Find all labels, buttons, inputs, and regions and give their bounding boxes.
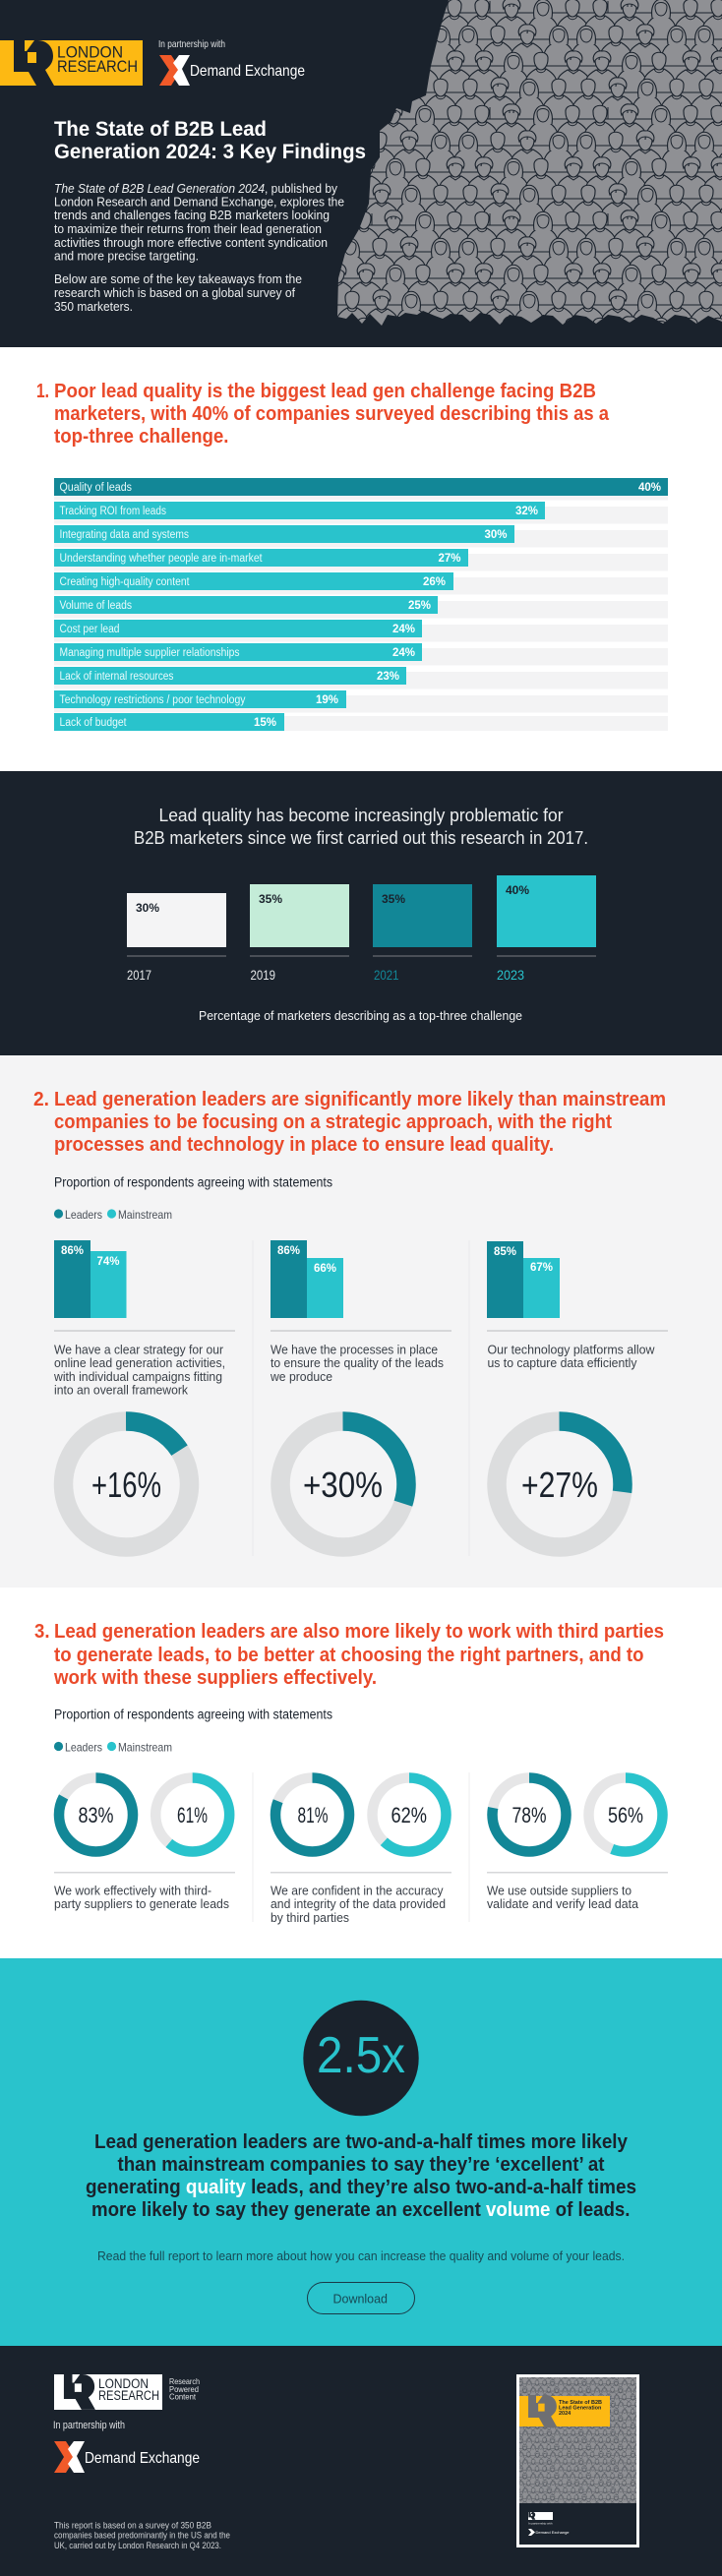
bar chart: challenges: Lack of budget xyxy=(59,717,127,729)
intro text: The State of B2B Lead Generation 2024, published by xyxy=(54,182,338,196)
report cover: The State of B2B xyxy=(559,2400,602,2406)
heading: finding 1: marketers, with 40% of companies surveyed describing this as a xyxy=(54,402,610,425)
chart subtitle: Proportion of respondents agreeing with statements xyxy=(54,1707,332,1721)
intro text: trends and challenges facing B2B marketers looking xyxy=(54,209,330,222)
column: effective suppliers xyxy=(54,1778,235,1911)
heading: trend: B2B marketers since we first carried out this research in 2017. xyxy=(134,828,588,848)
key message: than mainstream companies to say they’re ‘excellent’ at xyxy=(118,2153,605,2176)
panel: finding 3 xyxy=(0,1588,722,1958)
key message: generating quality leads, and they’re also two-and-a-half times xyxy=(86,2176,636,2198)
legend: Leaders xyxy=(65,1208,102,1222)
heading: finding 2: companies to be focusing on a strategic approach, with the right xyxy=(54,1110,612,1133)
bar chart: challenges: Understanding whether people are in-market xyxy=(59,553,263,565)
heading: finding 3: work with these suppliers effectively. xyxy=(53,1666,377,1689)
bar chart: yearly percentages: 2019 xyxy=(250,967,275,983)
methodology note: UK, carried out by London Research in Q4 2023. xyxy=(54,2541,221,2551)
tagline: Content xyxy=(169,2392,197,2402)
report cover: Demand Exchange xyxy=(535,2530,570,2535)
logo: London Research xyxy=(54,2374,162,2410)
logo: Demand Exchange: Demand Exchange xyxy=(85,2450,200,2467)
bar chart: yearly percentages xyxy=(127,875,596,983)
bar chart: challenges: Quality of leads xyxy=(59,482,132,494)
column: technology platforms: Our technology platforms allow xyxy=(488,1342,655,1357)
column: clear strategy: into an overall framework xyxy=(54,1383,188,1397)
bar chart: challenges: 40% xyxy=(638,482,661,494)
bar chart: challenges: Cost per lead xyxy=(59,624,120,635)
column: data confidence: and integrity of the data provided xyxy=(271,1896,446,1911)
column: technology platforms: +27% xyxy=(521,1465,598,1505)
panel: call to action xyxy=(0,1958,722,2346)
bar chart: challenges: 24% xyxy=(392,624,415,635)
intro text: 350 marketers. xyxy=(54,300,133,314)
heading: finding 1: top-three challenge. xyxy=(54,425,228,448)
column: clear strategy: 74% xyxy=(96,1256,120,1268)
bar chart: challenges: Tracking ROI from leads xyxy=(59,506,166,517)
report cover: In partnership with xyxy=(528,2522,553,2526)
heading: finding 2 xyxy=(33,1088,666,1156)
partnership label: In partnership with xyxy=(158,38,225,50)
intro text: London Research and Demand Exchange, explores the xyxy=(54,195,344,209)
chart subtitle: Proportion of respondents agreeing with statements xyxy=(54,1174,332,1190)
dividers xyxy=(252,1772,470,1922)
column: quality processes xyxy=(270,1240,451,1547)
bar chart: yearly percentages: 2021 xyxy=(374,967,399,983)
panel: lead quality trend xyxy=(0,771,722,1055)
bar chart: challenges: Creating high-quality content xyxy=(59,576,190,588)
logo: Demand Exchange: Demand Exchange xyxy=(190,63,305,80)
logo: London Research: RESEARCH xyxy=(98,2388,159,2403)
panel: finding 1 xyxy=(0,347,722,771)
download button xyxy=(307,2282,415,2313)
title: Generation 2024: 3 Key Findings xyxy=(54,140,366,163)
column: quality processes: We have the processes in place xyxy=(271,1342,438,1357)
logo: London Research xyxy=(0,40,143,86)
key message: Lead generation leaders are two-and-a-half times more likely xyxy=(94,2130,629,2153)
legend xyxy=(54,1208,172,1222)
bar chart: yearly percentages: 30% xyxy=(136,901,159,915)
intro text: Below are some of the key takeaways from the xyxy=(54,272,302,286)
column: data confidence xyxy=(271,1778,451,1925)
tagline: Powered xyxy=(169,2384,199,2394)
bar chart: yearly percentages: 35% xyxy=(259,892,282,906)
column: data confidence: 62% xyxy=(391,1803,427,1827)
bar chart: challenges: 24% xyxy=(392,647,415,659)
column: outside suppliers: We use outside suppliers to xyxy=(487,1883,632,1898)
intro text xyxy=(54,182,344,314)
heading: finding 1 xyxy=(36,380,610,448)
logo: Demand Exchange xyxy=(159,55,305,86)
bar chart: challenges: Volume of leads xyxy=(59,600,132,612)
panel: hero header xyxy=(0,0,722,347)
logo: London Research: LONDON xyxy=(57,43,123,61)
column: technology platforms: 85% xyxy=(494,1246,516,1258)
intro text: research which is based on a global survey of xyxy=(54,286,296,300)
intro text: and more precise targeting. xyxy=(54,250,199,264)
logo: London Research: LONDON xyxy=(98,2376,149,2391)
bar chart: challenges: 30% xyxy=(484,529,508,541)
column: effective suppliers: 83% xyxy=(79,1803,114,1827)
partnership label: In partnership with xyxy=(53,2420,125,2431)
report cover: 2024 xyxy=(559,2411,572,2417)
column: technology platforms: us to capture data efficiently xyxy=(488,1355,637,1370)
column: effective suppliers: 61% xyxy=(177,1803,208,1827)
intro text: to maximize their returns from their lead generation xyxy=(54,222,322,236)
column: clear strategy xyxy=(53,1240,235,1547)
legend: Mainstream xyxy=(118,1741,172,1755)
legend: Leaders xyxy=(65,1741,102,1755)
methodology note: companies based predominantly in the US and the xyxy=(54,2530,230,2542)
heading: finding 2: 2. xyxy=(33,1088,49,1110)
key message: more likely to say they generate an excellent volume of leads. xyxy=(91,2198,631,2221)
bar chart: yearly percentages: 2023 xyxy=(497,967,524,983)
bar chart: challenges: 32% xyxy=(515,506,538,517)
column: quality processes: 86% xyxy=(277,1245,300,1257)
dividers xyxy=(252,1240,470,1556)
heading: finding 2: Lead generation leaders are significantly more likely than mainstream xyxy=(54,1088,666,1110)
intro text: activities through more effective content syndication xyxy=(54,236,328,250)
illustration: crowd of people xyxy=(337,0,722,326)
logo: London Research: RESEARCH xyxy=(57,57,138,76)
bar chart: challenges: Lack of internal resources xyxy=(59,671,174,683)
heading: finding 3 xyxy=(34,1620,664,1689)
bar chart: challenges: 26% xyxy=(423,576,446,588)
column: effective suppliers: We work effectively with third- xyxy=(54,1883,211,1898)
bar chart: challenges: 27% xyxy=(438,553,460,565)
heading: finding 3: 3. xyxy=(34,1620,49,1643)
column: quality processes: 66% xyxy=(314,1263,336,1275)
report cover xyxy=(516,2374,639,2547)
column: data confidence: by third parties xyxy=(271,1910,349,1925)
title xyxy=(54,117,366,163)
methodology note xyxy=(54,2520,230,2551)
column: outside suppliers: validate and verify lead data xyxy=(487,1896,639,1911)
panel: finding 2 xyxy=(0,1055,722,1588)
column: data confidence: We are confident in the accuracy xyxy=(271,1883,444,1898)
report cover: Lead Generation xyxy=(559,2406,602,2412)
column: technology platforms xyxy=(487,1241,668,1547)
column: outside suppliers: 56% xyxy=(608,1803,643,1827)
tagline xyxy=(169,2376,200,2402)
heading: finding 1: Poor lead quality is the biggest lead gen challenge facing B2B xyxy=(54,380,596,402)
column: clear strategy: with individual campaigns fitting xyxy=(53,1369,222,1384)
column: quality processes: to ensure the quality of the leads xyxy=(271,1355,444,1370)
column: clear strategy: 86% xyxy=(61,1245,84,1257)
heading: finding 2: processes and technology in place to ensure lead quality. xyxy=(54,1133,554,1156)
heading: finding 3: Lead generation leaders are also more likely to work with third parties xyxy=(54,1620,664,1643)
bar chart: yearly percentages: 2017 xyxy=(127,967,151,983)
column: clear strategy: online lead generation activities, xyxy=(54,1355,225,1370)
bar chart: challenges: 19% xyxy=(316,694,338,706)
bar chart: challenges: Integrating data and systems xyxy=(59,529,189,541)
methodology note: This report is based on a survey of 350 B2B xyxy=(54,2520,211,2532)
column: outside suppliers: 78% xyxy=(511,1803,547,1827)
chart caption: Percentage of marketers describing as a top-three challenge xyxy=(199,1008,522,1023)
badge: 2.5x: 2.5x xyxy=(317,2027,405,2084)
heading: trend xyxy=(134,806,588,848)
heading: trend: Lead quality has become increasingly problematic for xyxy=(159,806,564,825)
title: The State of B2B Lead xyxy=(54,117,267,141)
column: technology platforms: 67% xyxy=(530,1262,553,1274)
column: clear strategy: We have a clear strategy for our xyxy=(54,1342,224,1357)
legend xyxy=(54,1741,172,1755)
tagline: Research xyxy=(169,2376,200,2386)
heading: finding 1: 1. xyxy=(36,380,49,402)
bar chart: challenges: 15% xyxy=(254,717,276,729)
column: clear strategy: +16% xyxy=(91,1465,161,1505)
legend: Mainstream xyxy=(118,1208,172,1222)
column: outside suppliers xyxy=(487,1778,668,1911)
column: quality processes: we produce xyxy=(270,1369,332,1384)
report prompt: Read the full report to learn more about how you can increase the quality and volume of your leads. xyxy=(97,2248,625,2263)
bar chart: yearly percentages: 40% xyxy=(506,883,529,897)
bar chart: challenges xyxy=(54,478,668,731)
column: effective suppliers: party suppliers to generate leads xyxy=(54,1896,229,1911)
download button: Download xyxy=(332,2292,388,2306)
bar chart: challenges: Technology restrictions / poor technology xyxy=(59,694,246,706)
key message xyxy=(86,2130,636,2221)
column: data confidence: 81% xyxy=(297,1803,329,1827)
bar chart: challenges: Managing multiple supplier relationships xyxy=(59,647,240,659)
bar chart: challenges: 23% xyxy=(377,671,399,683)
panel: footer xyxy=(0,2346,722,2576)
badge: 2.5x xyxy=(303,2001,419,2116)
bar chart: challenges: 25% xyxy=(408,600,431,612)
column: quality processes: +30% xyxy=(303,1465,383,1505)
logo: Demand Exchange xyxy=(54,2441,200,2473)
bar chart: yearly percentages: 35% xyxy=(382,892,405,906)
heading: finding 3: to generate leads, to be better at choosing the right partners, and to xyxy=(54,1644,643,1666)
